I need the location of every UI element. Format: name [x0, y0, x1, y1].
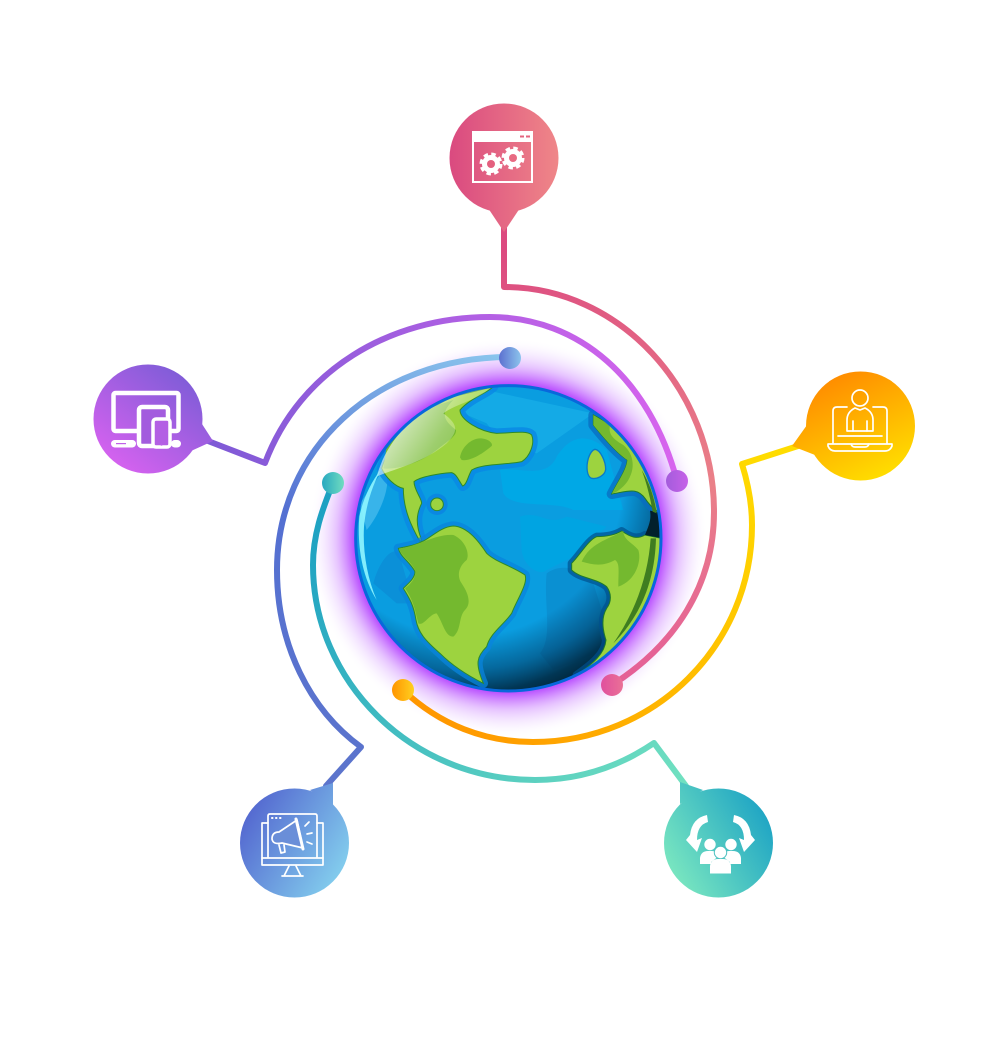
connector: yellow line — [403, 446, 798, 742]
end dot: orange — [392, 679, 414, 701]
icon: monitor tablet and phone — [111, 393, 181, 448]
end dot: blue — [499, 347, 521, 369]
globe rim — [356, 386, 661, 691]
bubble: left devices — [94, 364, 213, 474]
land: island right — [587, 449, 606, 479]
bubble: bottom left marketing — [240, 783, 349, 898]
land: upper right continent — [593, 415, 662, 513]
end dot: pink — [601, 674, 623, 696]
gloss highlight — [377, 385, 493, 477]
end dot: teal — [322, 472, 344, 494]
land: lower left continent — [398, 526, 526, 683]
connector: blue line — [277, 357, 510, 786]
dark terminator band — [645, 510, 660, 538]
icon: megaphone on monitor — [262, 814, 323, 876]
land: small island left — [426, 494, 448, 515]
bubble: top settings — [450, 104, 558, 232]
land: upper left continent — [382, 387, 533, 542]
globe glow halo — [308, 338, 708, 738]
rim light — [359, 468, 382, 600]
end dot: purple — [666, 470, 688, 492]
bubble: bottom right team — [664, 782, 773, 898]
icon: person on laptop — [828, 390, 892, 451]
connector: teal line — [313, 483, 686, 786]
infographic: globe with five connected icons — [94, 104, 915, 898]
icon: browser window with gears — [473, 132, 532, 182]
connector: purple line — [208, 317, 677, 481]
icon: team with cycle arrows — [686, 815, 755, 874]
land: lower right continent — [572, 531, 662, 675]
bubble: right laptop user — [792, 372, 915, 480]
globe — [353, 383, 663, 693]
connector: pink line — [504, 228, 714, 685]
